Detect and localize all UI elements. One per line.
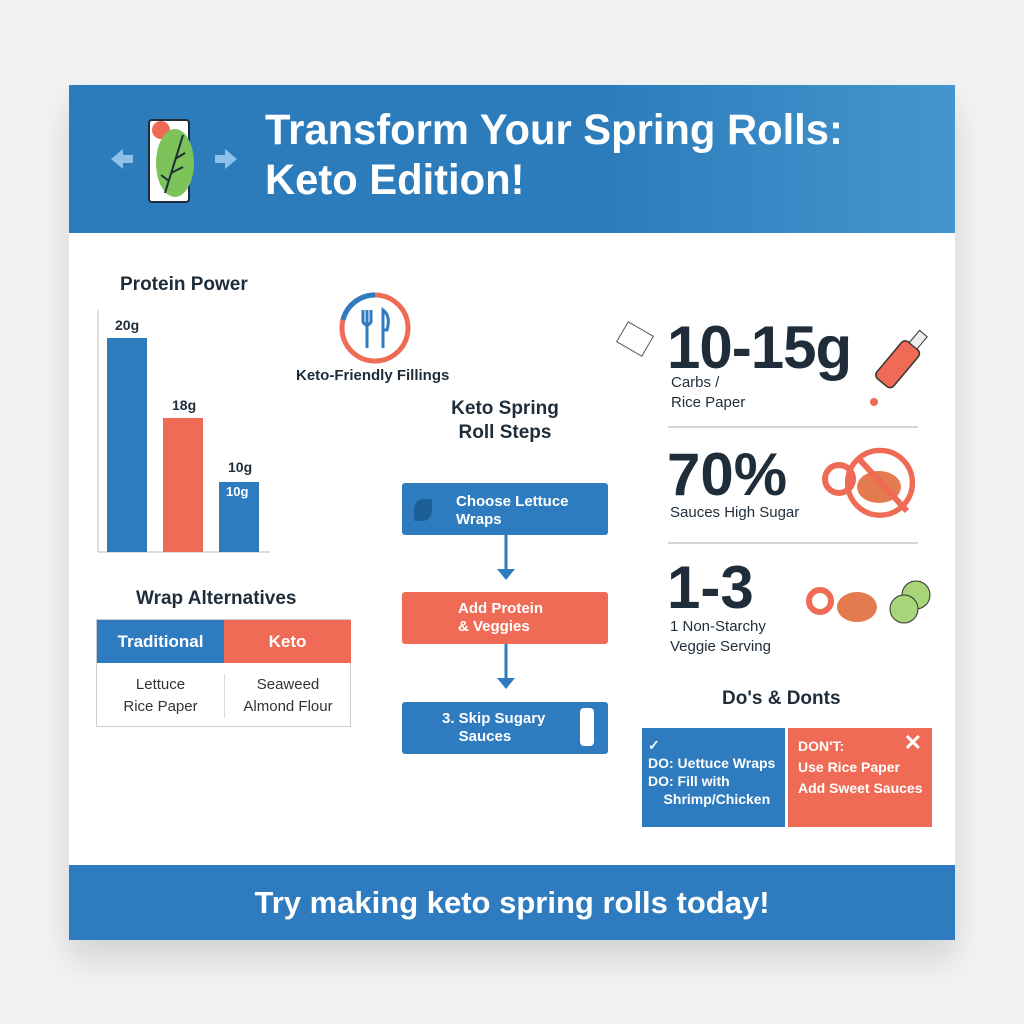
icon: fork knife ring <box>340 292 410 364</box>
stat: veggies: 1 Non-Starchy <box>670 618 766 635</box>
title: Keto Edition! <box>265 156 524 204</box>
dont box: Use Rice Paper <box>798 759 900 775</box>
bar chart <box>98 310 270 552</box>
dont box: DON'T: <box>798 738 844 754</box>
table: Keto <box>269 632 306 651</box>
header banner <box>69 85 955 233</box>
icon: shrimp chicken cucumber <box>806 580 930 624</box>
bar chart: 18g <box>172 397 196 413</box>
table: Seaweed <box>257 676 319 693</box>
heading: Roll Steps <box>459 422 551 443</box>
step 2 <box>402 592 608 644</box>
do box: DO: Fill with <box>648 773 730 789</box>
do box: Shrimp/Chicken <box>664 791 770 807</box>
icon: no chicken <box>822 448 916 518</box>
card <box>69 85 955 940</box>
heading <box>451 398 559 443</box>
dont box <box>788 728 932 827</box>
heading: Protein Power <box>120 274 248 295</box>
table: Lettuce <box>136 676 185 693</box>
step 3: Sauces <box>459 728 511 745</box>
step 2: Add Protein <box>458 600 543 617</box>
arrow <box>497 644 515 689</box>
bar chart: 10g <box>226 484 248 499</box>
panel: wrap alternatives <box>96 588 351 727</box>
title: Transform Your Spring Rolls: <box>265 106 843 154</box>
bar chart: 20g <box>115 317 139 333</box>
step 3: 3. Skip Sugary <box>442 710 545 727</box>
heading: Do's & Donts <box>722 688 841 709</box>
table <box>96 619 351 727</box>
stat: veggies <box>667 554 930 655</box>
stat: carbs <box>616 314 928 411</box>
label: Keto-Friendly Fillings <box>296 367 449 384</box>
step 2: & Veggies <box>458 618 530 635</box>
bar chart: 10g <box>228 459 252 475</box>
stat: sauces: 70% <box>667 441 787 508</box>
stat: veggies: 1-3 <box>667 554 754 621</box>
table: Traditional <box>118 632 203 651</box>
step 1: Choose Lettuce <box>456 493 569 510</box>
do box: DO: Uettuce Wraps <box>648 755 775 771</box>
stat: carbs: Rice Paper <box>671 394 745 411</box>
dont box: ✕ <box>904 730 922 755</box>
icon: lettuce wrap <box>111 119 237 203</box>
panel: steps <box>402 398 608 754</box>
step 3 <box>402 702 608 754</box>
do box: ✓ <box>648 737 660 753</box>
step 1: Wraps <box>456 511 502 528</box>
do box <box>642 728 785 827</box>
heading: Keto Spring <box>451 398 559 419</box>
panel: protein power <box>98 274 270 552</box>
footer banner <box>69 865 955 940</box>
dont box: Add Sweet Sauces <box>798 780 922 796</box>
table: Rice Paper <box>123 698 198 715</box>
icon: rice paper <box>616 321 654 357</box>
heading: Wrap Alternatives <box>136 588 296 609</box>
stat: veggies: Veggie Serving <box>670 638 771 655</box>
number: 10-15g <box>667 314 851 381</box>
panel: keto-friendly fillings <box>296 292 449 384</box>
arrow <box>497 535 515 580</box>
step 1 <box>402 483 608 535</box>
stat: sauces <box>667 441 916 521</box>
stat: sauces: Sauces High Sugar <box>670 504 799 521</box>
stat: carbs: Carbs / <box>671 374 719 391</box>
panel: do's & donts <box>642 688 932 827</box>
title <box>265 106 843 204</box>
icon: sauce bottle <box>870 330 928 406</box>
footer banner: Try making keto spring rolls today! <box>254 885 770 920</box>
table: Almond Flour <box>243 698 333 715</box>
